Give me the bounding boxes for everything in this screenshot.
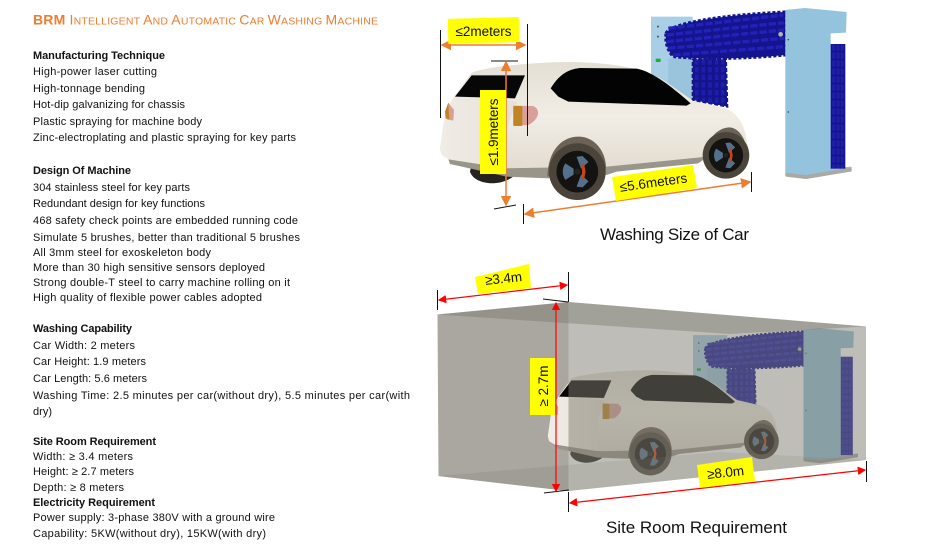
caption: washing size of car: Washing Size of Car bbox=[600, 225, 749, 244]
text block: site room requirement: Height: ≥ 2.7 meters bbox=[33, 466, 134, 478]
panel: site room diagram bbox=[438, 302, 866, 491]
text block: design of machine: 304 stainless steel for key parts bbox=[33, 182, 190, 194]
dimension: car height: ≤1.9meters bbox=[486, 98, 501, 166]
caption: site room requirement: Site Room Requirement bbox=[606, 518, 787, 537]
text block: manufacturing technique: Manufacturing Technique bbox=[33, 50, 165, 62]
text block: manufacturing technique: Plastic spraying for machine body bbox=[33, 116, 202, 128]
text block: design of machine: Simulate 5 brushes, better than traditional 5 brushes bbox=[33, 232, 300, 244]
text block: design of machine: High quality of flexible power cables adopted bbox=[33, 292, 262, 304]
text block: site room requirement: Depth: ≥ 8 meters bbox=[33, 482, 124, 494]
text block: design of machine: Strong double-T steel to carry machine rolling on it bbox=[33, 277, 290, 289]
text block: washing capability: Car Width: 2 meters bbox=[33, 340, 136, 352]
room floor bbox=[568, 452, 866, 491]
text block: design of machine: More than 30 high sensitive sensors deployed bbox=[33, 262, 265, 274]
room ceiling bbox=[438, 302, 866, 334]
text block: site room requirement: Site Room Requirement bbox=[33, 436, 156, 448]
room end floor shade bbox=[438, 465, 568, 491]
dimension: room height: ≥ 2.7m bbox=[536, 366, 551, 406]
text block: washing capability: Car Height: 1.9 meters bbox=[33, 356, 146, 368]
text block: manufacturing technique bbox=[33, 50, 296, 144]
text block: manufacturing technique: High-power laser cutting bbox=[33, 66, 157, 78]
room end face bbox=[438, 302, 568, 491]
text block: washing capability: Washing Capability bbox=[33, 323, 133, 335]
text block: washing capability bbox=[33, 323, 410, 418]
title: BRM INTELLIGENT AND AUTOMATIC CAR WASHING MACHINE bbox=[33, 12, 378, 28]
text block: design of machine: Redundant design for key functions bbox=[33, 198, 206, 210]
text block: design of machine: All 3mm steel for exoskeleton body bbox=[33, 247, 212, 259]
text block: washing capability: Washing Time: 2.5 minutes per car(without dry), 5.5 minutes per car(with bbox=[33, 390, 410, 402]
text block: electricity requirement bbox=[33, 497, 275, 540]
text block: design of machine: Design Of Machine bbox=[33, 165, 131, 177]
dimension: room width bbox=[438, 264, 568, 310]
dimension: car width: ≤2meters bbox=[456, 24, 512, 39]
illustration: car bbox=[440, 62, 749, 200]
text block: manufacturing technique: High-tonnage bending bbox=[33, 83, 145, 95]
text block: design of machine bbox=[33, 165, 300, 304]
dimension: room length bbox=[568, 457, 866, 512]
ghosted machine bbox=[693, 328, 858, 463]
ghosted car bbox=[548, 370, 779, 475]
text block: site room requirement: Width: ≥ 3.4 meters bbox=[33, 451, 134, 463]
dimension: room width: ≥3.4m bbox=[484, 269, 523, 288]
illustration: washing machine bbox=[651, 8, 852, 179]
dimension: room length: ≥8.0m bbox=[706, 463, 745, 482]
text block: electricity requirement: Power supply: 3-phase 380V with a ground wire bbox=[33, 512, 275, 524]
text block: design of machine: 468 safety check points are embedded running code bbox=[33, 215, 298, 227]
text block: manufacturing technique: Hot-dip galvanizing for chassis bbox=[33, 99, 186, 111]
text block: manufacturing technique: Zinc-electroplating and plastic spraying for key parts bbox=[33, 132, 296, 144]
dimension: car length: ≤5.6meters bbox=[619, 170, 688, 195]
dimension: car height bbox=[480, 61, 518, 209]
dimension: car length bbox=[524, 165, 752, 224]
room side face bbox=[568, 302, 866, 491]
text block: electricity requirement: Capability: 5KW(without dry), 15KW(with dry) bbox=[33, 528, 266, 540]
dimension: room height bbox=[530, 299, 569, 493]
text block: electricity requirement: Electricity Requirement bbox=[33, 497, 155, 509]
dimension: car width bbox=[440, 17, 528, 136]
text block: site room requirement bbox=[33, 436, 156, 494]
text block: washing capability: Car Length: 5.6 meters bbox=[33, 373, 148, 385]
text block: washing capability: dry) bbox=[33, 406, 52, 418]
